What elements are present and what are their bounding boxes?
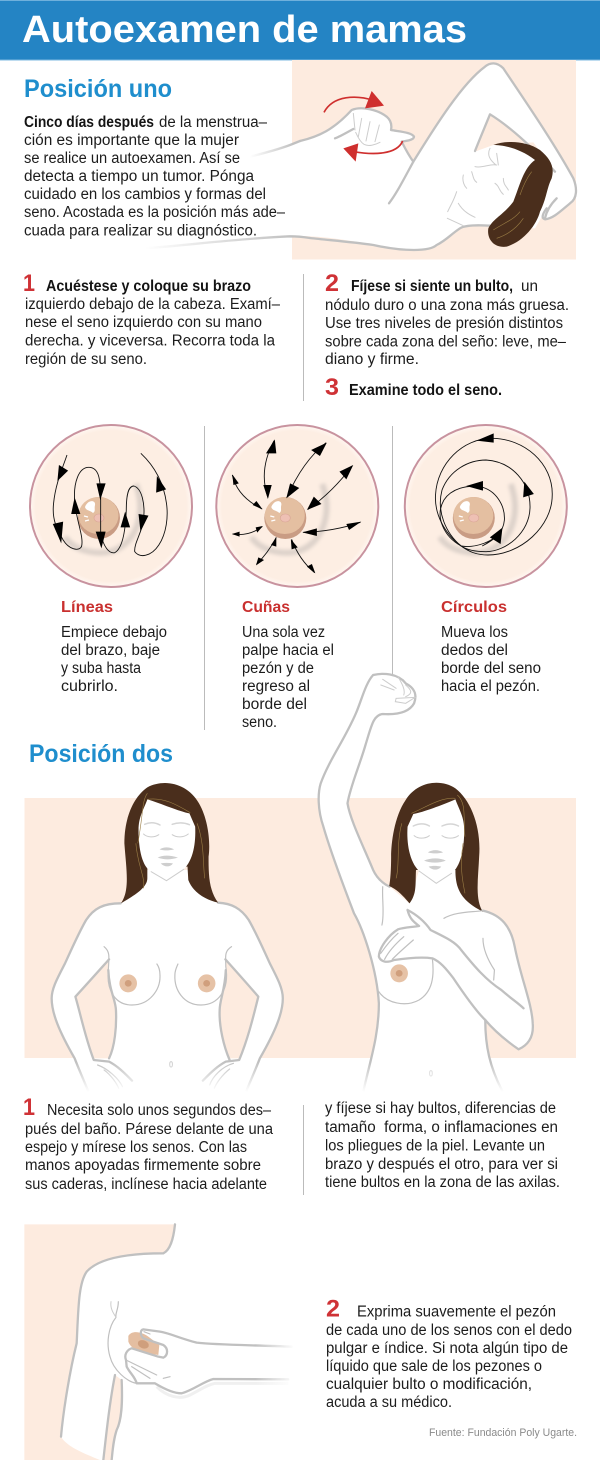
step 2 position two (326, 1296, 572, 1411)
step 2 position two: líquido que sale de los pezones o (326, 1358, 542, 1375)
header bar (0, 0, 600, 60)
step 2 position one: Fíjese si siente un bulto, (351, 278, 513, 295)
step 1 position two, left column: Necesita solo unos segundos des– (47, 1102, 271, 1119)
hair (389, 783, 483, 912)
rotation arrows (324, 91, 403, 162)
intro text: de la menstrua– (159, 114, 267, 131)
step 1 position one: derecha. y viceversa. Recorra toda la (25, 332, 275, 350)
step 1 position two, left column: pués del baño. Párese delante de una (25, 1121, 273, 1138)
step 2 position two: pulgar e índice. Si nota algún tipo de (326, 1340, 568, 1357)
step 2 position one (325, 270, 569, 368)
hand (125, 1329, 292, 1393)
labels and text: cuñas (242, 599, 334, 731)
intro text: seno. Acostada es la posición más ade– (24, 204, 285, 221)
labels and text: cuñas: regreso al (242, 678, 310, 695)
intro text: detecta a tiempo un tumor. Pónga (24, 168, 254, 185)
step 1 position two, left column: espejo y mírese los senos. Con las (25, 1139, 247, 1156)
labels and text: círculos: Mueva los (441, 624, 508, 641)
step 2 position one: nódulo duro o una zona más gruesa. (325, 297, 569, 314)
step 3 position one: Examine todo el seno. (349, 382, 502, 399)
intro text: cuidado en los cambios y formas del (24, 186, 266, 203)
step 1 position one: izquierdo debajo de la cabeza. Examí– (25, 296, 280, 313)
labels and text: líneas: cubrirlo. (61, 678, 118, 695)
diagram: líneas (30, 425, 192, 587)
step 1 position one: Acuéstese y coloque su brazo (46, 278, 251, 295)
step 1 position one: 1 (23, 270, 35, 297)
navel (430, 1071, 432, 1076)
heading: Posición dos: Posición dos (29, 740, 173, 768)
face (407, 799, 464, 883)
step 2 position two: de cada uno de los senos con el dedo (326, 1322, 572, 1339)
navel (170, 1062, 172, 1067)
step 1 position two, right column: y fíjese si hay bultos, diferencias de (325, 1100, 556, 1117)
illustration: woman hands on hips (52, 783, 283, 1091)
labels and text: círculos (441, 599, 541, 695)
step 2 position one: 2 (325, 270, 339, 297)
hair (488, 142, 553, 247)
step 1 position two, left column: 1 (23, 1094, 35, 1121)
step 3 position one (325, 374, 502, 401)
labels and text: círculos: Círculos (441, 599, 507, 616)
step 1 position two, right column (325, 1100, 560, 1191)
step 2 position two: 2 (326, 1296, 340, 1322)
face (139, 799, 195, 881)
areola (128, 1332, 159, 1355)
illustration: woman lying down (145, 63, 576, 250)
intro text: Cinco días después (24, 114, 154, 131)
labels and text: cuñas: Una sola vez (242, 624, 325, 641)
intro text (24, 114, 285, 240)
step 1 position two, right column: tiene bultos en la zona de las axilas. (325, 1174, 560, 1191)
hair (121, 783, 218, 903)
intro text: se realice un autoexamen. Así se (24, 150, 240, 167)
illustration: hand pressing nipple (24, 1224, 292, 1460)
step 1 position two, left column: manos apoyadas firmemente sobre (25, 1157, 261, 1174)
labels and text: cuñas: Cuñas (242, 599, 290, 616)
breasts (104, 947, 232, 1005)
labels and text: líneas: Empiece debajo (61, 624, 167, 641)
step 3 position one: 3 (325, 374, 339, 401)
diagram: círculos (405, 425, 567, 587)
torso and arm gaps (75, 959, 258, 1081)
heading: Posición uno: Posición uno (24, 75, 172, 103)
labels and text: cuñas: borde del (242, 696, 307, 713)
intro text: ción es importante que la mujer (24, 132, 239, 149)
labels and text: cuñas: palpe hacia el (242, 642, 334, 659)
step 1 position two, right column: tamaño forma, o inflamaciones en (325, 1119, 558, 1136)
labels and text: cuñas: seno. (242, 714, 277, 731)
source credit: Fuente: Fundación Poly Ugarte. (429, 1427, 577, 1439)
step 1 position one: nese el seno izquierdo con su mano (25, 314, 262, 331)
labels and text: líneas: del brazo, baje (61, 642, 160, 659)
step 2 position one: sobre cada zona del seño: leve, me– (325, 334, 566, 350)
step 1 position one: región de su seno. (25, 351, 147, 368)
position two panel background (24, 798, 576, 1058)
labels and text: líneas (61, 599, 167, 695)
step 1 position two, left column: sus caderas, inclínese hacia adelante (25, 1176, 267, 1193)
step 1 position two, right column: los pliegues de la piel. Levante un (325, 1138, 545, 1154)
step 1 position one (23, 270, 280, 368)
illustration: woman with raised arm (319, 674, 533, 1091)
breast and hand (379, 887, 524, 1020)
intro text: cuada para realizar su diagnóstico. (24, 222, 257, 240)
labels and text: líneas: Líneas (61, 599, 113, 616)
step 2 position one: Use tres niveles de presión distintos (325, 315, 563, 332)
labels and text: círculos: dedos del (441, 642, 508, 659)
step 2 position two: acuda a su médico. (326, 1394, 452, 1411)
step 2 position two: Exprima suavemente el pezón (357, 1304, 556, 1320)
labels and text: círculos: borde del seno (441, 660, 541, 677)
hands on hips (98, 1063, 233, 1088)
intro panel background (292, 60, 576, 260)
hand shadow (157, 1383, 288, 1397)
step 1 position two, right column: brazo y después el otro, para ver si (325, 1156, 558, 1173)
step 1 position two, left column (23, 1094, 273, 1193)
labels and text: círculos: hacia el pezón. (441, 678, 540, 695)
labels and text: cuñas: pezón y de (242, 660, 314, 677)
title: Autoexamen de mamas (22, 9, 467, 51)
diagram: cuñas (216, 425, 378, 587)
labels and text: líneas: y suba hasta (61, 660, 141, 677)
step 2 position two: cualquier bulto o modificación, (326, 1376, 532, 1393)
step 2 position one: diano y firme. (325, 351, 419, 368)
step 2 position one: un (521, 278, 538, 295)
